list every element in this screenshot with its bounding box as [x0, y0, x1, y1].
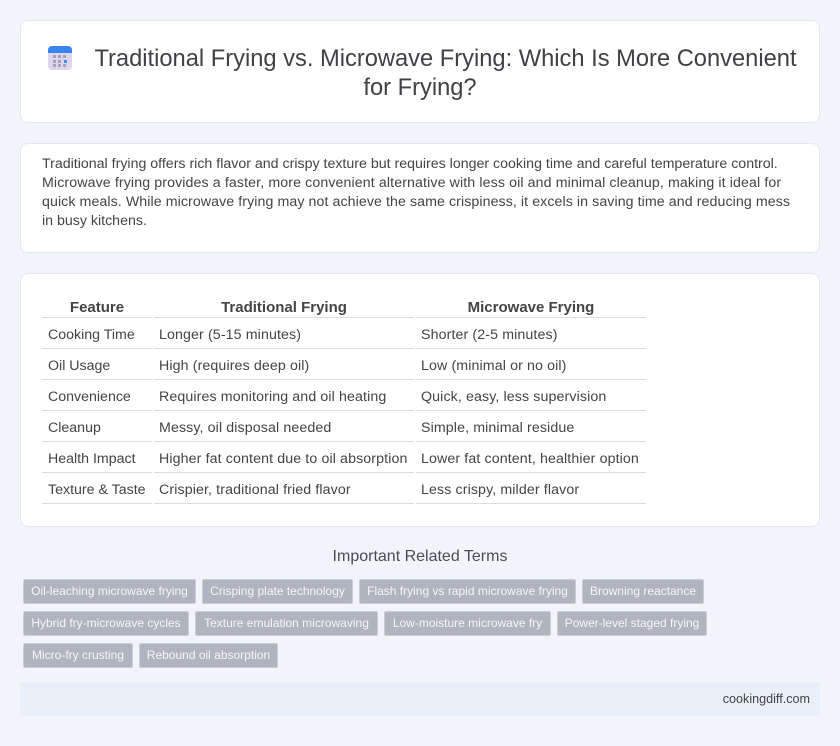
panel: introduction text: Microwave frying provides a faster, more convenient alternative with less oil and minimal cleanup, making it ideal for: [42, 175, 781, 191]
panel: related term tags: Flash frying vs rapid microwave frying: [367, 584, 568, 598]
panel: comparison table: Higher fat content due to oil absorption: [159, 451, 408, 467]
panel: introduction text: Traditional frying offers rich flavor and crispy texture but requires longer cooking time and careful temperature control.: [42, 156, 778, 172]
title: for Frying?: [363, 75, 477, 101]
panel: comparison table: Traditional Frying: [221, 299, 347, 316]
panel: related term tags: Micro-fry crusting: [32, 648, 124, 662]
panel: comparison table: Less crispy, milder flavor: [421, 482, 579, 498]
title: Traditional Frying vs. Microwave Frying: Which Is More Convenient: [94, 46, 797, 72]
heading: related terms: Important Related Terms: [333, 548, 507, 565]
panel: comparison table: Requires monitoring and oil heating: [159, 389, 386, 405]
icon: calendar: [48, 46, 72, 70]
panel: comparison table: High (requires deep oil): [159, 358, 309, 374]
panel: introduction text: quick meals. While microwave frying may not achieve the same crispiness, it excels in saving time and reducing mess: [42, 194, 790, 210]
panel: comparison table: Health Impact: [48, 451, 136, 467]
panel: related term tags: Oil-leaching microwave frying: [31, 584, 188, 598]
panel: comparison table: Crispier, traditional fried flavor: [159, 482, 351, 498]
panel: comparison table: [20, 273, 820, 527]
panel: comparison table: Cooking Time: [48, 327, 135, 343]
panel: comparison table: Lower fat content, healthier option: [421, 451, 639, 467]
panel: comparison table: Feature: [70, 299, 124, 316]
panel: related term tags: Texture emulation microwaving: [204, 616, 369, 630]
panel: related term tags: Browning reactance: [590, 584, 696, 598]
panel: introduction text: [20, 143, 820, 253]
panel: related term tags: Low-moisture microwave fry: [393, 616, 542, 630]
panel: comparison table: Quick, easy, less supervision: [421, 389, 606, 405]
panel: comparison table: Messy, oil disposal needed: [159, 420, 331, 436]
footer source text: cookingdiff.com: [723, 692, 810, 706]
panel: related term tags: [23, 579, 707, 668]
panel: related term tags: Rebound oil absorption: [147, 648, 270, 662]
panel: comparison table: Low (minimal or no oil): [421, 358, 566, 374]
panel: introduction text: in busy kitchens.: [42, 213, 147, 229]
panel: comparison table: Simple, minimal residue: [421, 420, 574, 436]
panel: comparison table: Convenience: [48, 389, 131, 405]
panel: related term tags: Power-level staged frying: [565, 616, 699, 630]
panel: title card: [20, 20, 820, 123]
panel: comparison table: Longer (5-15 minutes): [159, 327, 301, 343]
panel: comparison table: Shorter (2-5 minutes): [421, 327, 558, 343]
panel: comparison table: Cleanup: [48, 420, 101, 436]
panel: comparison table: Oil Usage: [48, 358, 110, 374]
title: [94, 46, 797, 101]
panel: related term tags: Crisping plate technology: [210, 584, 345, 598]
panel: related term tags: Hybrid fry-microwave cycles: [31, 616, 181, 630]
panel: comparison table: Microwave Frying: [468, 299, 594, 316]
panel: comparison table: Texture & Taste: [48, 482, 146, 498]
footer: [20, 682, 820, 716]
